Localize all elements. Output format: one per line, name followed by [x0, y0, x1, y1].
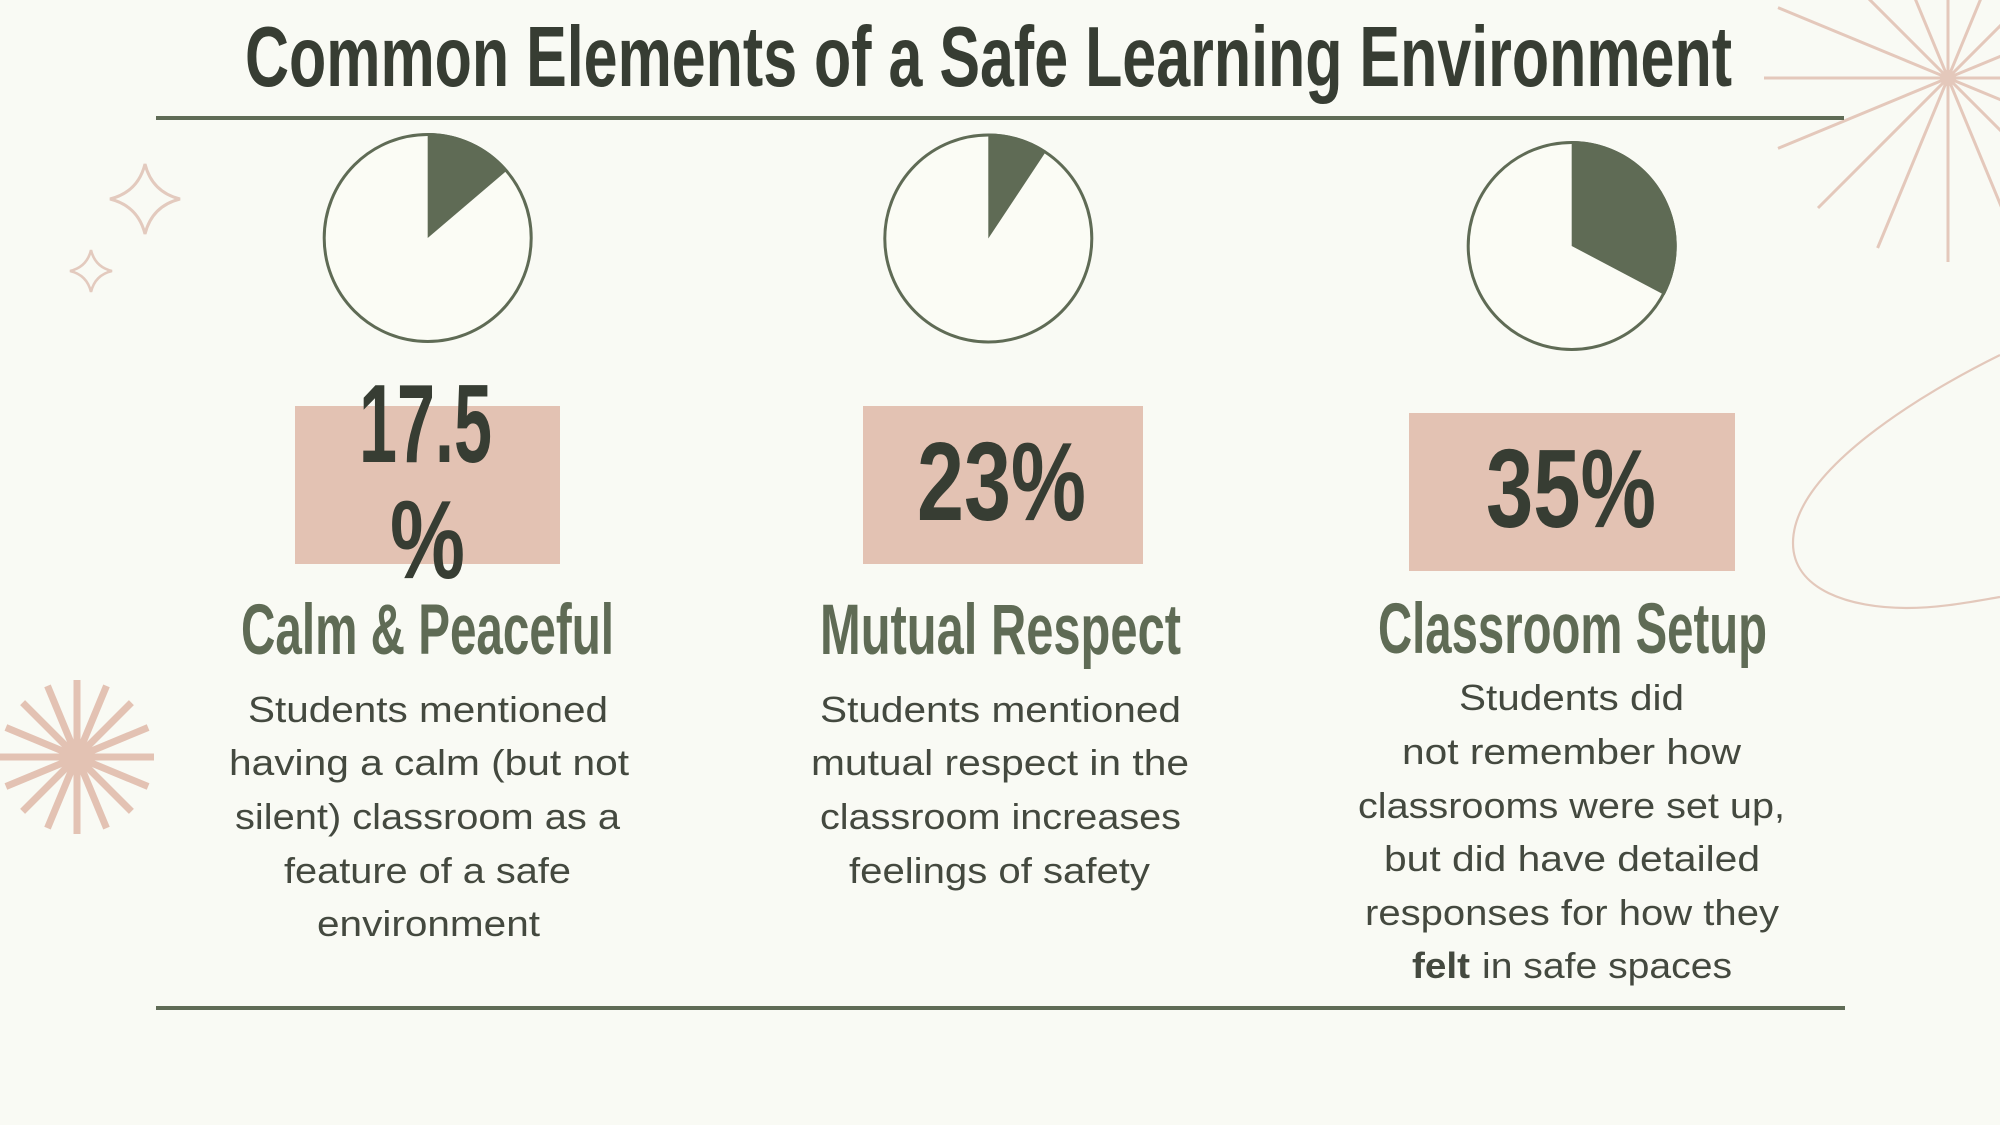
decoration: large starburst top right: [1764, 0, 2000, 262]
body text: Mutual Respect: mutual respect in the: [811, 742, 1189, 783]
body text: Calm & Peaceful: Students mentioned: [248, 689, 608, 730]
body text: Classroom Setup: classrooms were set up,: [1358, 785, 1785, 826]
body text: Classroom Setup: but did have detailed: [1384, 838, 1760, 879]
body text: Classroom Setup: felt: [1412, 945, 1470, 986]
heading: Mutual Respect: Mutual Respect: [820, 591, 1181, 670]
body text: Calm & Peaceful: [229, 689, 629, 944]
stat box: 23%: 23%: [917, 420, 1086, 544]
panel: Mutual Respect: [811, 134, 1189, 891]
body text: Mutual Respect: classroom increases: [820, 796, 1181, 837]
decoration: small sparkle: [70, 250, 112, 292]
stat box: 17.5%: [295, 362, 560, 602]
bottom divider line: [156, 1006, 1845, 1010]
panel: Classroom Setup: [1358, 141, 1785, 986]
body text: Classroom Setup: not remember how: [1402, 731, 1742, 772]
top divider line: [156, 116, 1844, 120]
stat box: 35%: 35%: [1486, 427, 1656, 551]
stat box: 35%: [1409, 413, 1735, 571]
body text: Classroom Setup: Students did: [1459, 677, 1684, 718]
body text: Calm & Peaceful: silent) classroom as a: [235, 796, 621, 837]
heading: Calm & Peaceful: Calm & Peaceful: [241, 591, 614, 670]
decoration: large sparkle: [110, 164, 180, 234]
stat box: 23%: [863, 406, 1143, 564]
body text: Classroom Setup: [1358, 677, 1785, 986]
panel: Calm & Peaceful: [229, 133, 629, 944]
body text: Mutual Respect: [811, 689, 1189, 891]
pie chart: 23%: [885, 134, 1092, 342]
decoration: curved ellipse outline right: [1793, 355, 2000, 608]
body text: Classroom Setup: in safe spaces: [1482, 945, 1732, 986]
body text: Classroom Setup: responses for how they: [1365, 892, 1779, 933]
body text: Mutual Respect: feelings of safety: [849, 850, 1150, 891]
body text: Calm & Peaceful: having a calm (but not: [229, 742, 629, 783]
body text: Mutual Respect: Students mentioned: [820, 689, 1181, 730]
stat box: 17.5%: 17.5: [359, 362, 492, 486]
heading: Classroom Setup: Classroom Setup: [1378, 590, 1767, 669]
pie chart: 35%: [1468, 141, 1677, 350]
body text: Calm & Peaceful: feature of a safe: [284, 850, 571, 891]
body text: Calm & Peaceful: environment: [317, 903, 540, 944]
pie chart: 17.5%: [324, 133, 531, 342]
stat box: 17.5%: %: [390, 478, 465, 602]
decoration: small starburst left: [0, 680, 154, 834]
